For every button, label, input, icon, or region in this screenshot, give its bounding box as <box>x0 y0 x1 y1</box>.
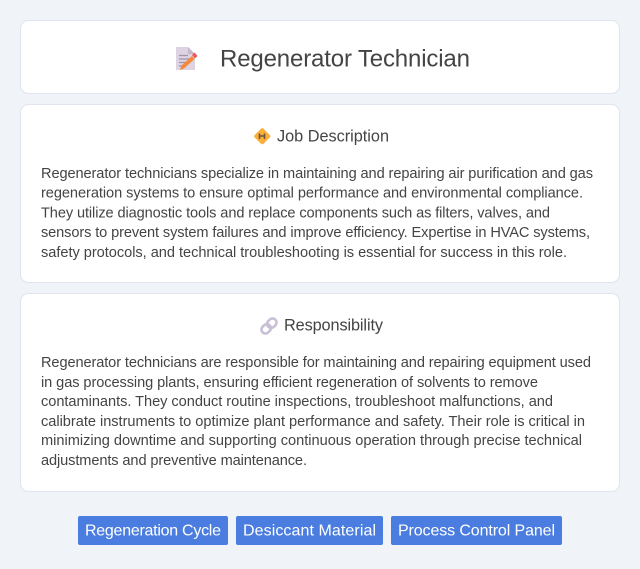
text block: job description <box>41 166 593 261</box>
tag: desiccant material <box>236 516 383 545</box>
text block: job description: sensors to prevent system failures and improve efficiency. Expertise in HVAC systems, <box>41 225 590 241</box>
text block: job description: regeneration systems to ensure optimal performance and environmental compliance. <box>41 186 583 202</box>
text block: responsibility: in gas processing plants, ensuring efficient regeneration of solvents to remove <box>41 375 538 391</box>
panel: job description <box>20 104 620 282</box>
text block: job description: safety protocols, and technical troubleshooting is essential for success in this role. <box>41 245 567 261</box>
text block: responsibility: calibrate instruments to optimize plant performance and safety. Their role is critical in <box>41 414 585 430</box>
text block: responsibility: contaminants. They conduct routine inspections, troubleshoot malfunctions, and <box>41 394 553 410</box>
text block: job description: They utilize diagnostic tools and replace components such as filters, valves, and <box>41 206 550 222</box>
title: Regenerator Technician <box>220 46 470 72</box>
tag: regeneration cycle: Regeneration Cycle <box>85 522 221 540</box>
icon: document with pencil <box>176 47 198 70</box>
text block: job description: Regenerator technicians specialize in maintaining and repairing air purification and gas <box>41 166 593 182</box>
text block: responsibility <box>41 355 591 469</box>
panel: responsibility <box>20 294 620 492</box>
heading: responsibility: Responsibility <box>284 316 384 334</box>
icon: chain link <box>260 317 278 335</box>
text block: responsibility: Regenerator technicians are responsible for maintaining and repairing equipment used <box>41 355 591 371</box>
tag: process control panel <box>391 516 562 545</box>
text block: responsibility: adjustments and preventive maintenance. <box>41 453 307 469</box>
icon: diamond road sign <box>253 127 271 145</box>
tag: desiccant material: Desiccant Material <box>243 522 376 540</box>
panel: title card <box>20 20 620 94</box>
tag: process control panel: Process Control Panel <box>398 522 555 540</box>
text block: responsibility: minimizing downtime and supporting continuous operation through precise technical <box>41 433 582 449</box>
heading: job description: Job Description <box>277 128 389 146</box>
tag: regeneration cycle <box>78 516 228 545</box>
